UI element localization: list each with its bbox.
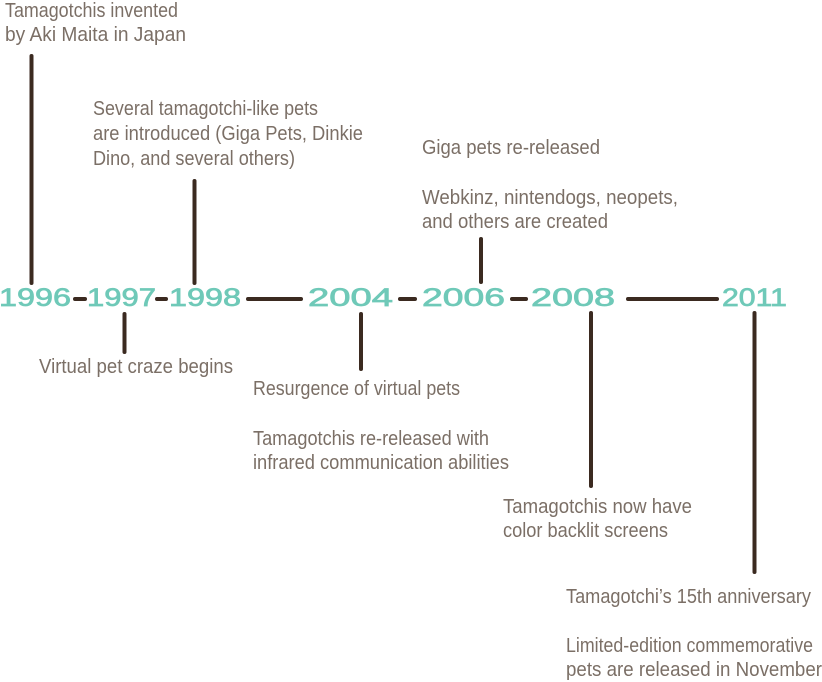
year labels: 2008 — [531, 284, 615, 312]
event 2004: Tamagotchis re-released with — [253, 428, 489, 450]
event 1998 — [93, 98, 363, 283]
event 1996 — [5, 0, 186, 283]
event 2008: color backlit screens — [503, 520, 668, 542]
year labels: 1998 — [169, 284, 241, 312]
event 1997: Virtual pet craze begins — [39, 356, 233, 378]
event 2011 — [566, 313, 822, 681]
event 1998: Dino, and several others) — [93, 148, 295, 170]
event 2006 — [422, 137, 678, 282]
year labels: 1997 — [87, 284, 156, 312]
event 2008: Tamagotchis now have — [503, 496, 692, 518]
year labels: 2006 — [422, 284, 505, 312]
year labels: 2011 — [722, 284, 787, 312]
event 2004: Resurgence of virtual pets — [253, 378, 460, 400]
event 2006: Webkinz, nintendogs, neopets, — [422, 187, 678, 209]
year labels — [0, 284, 787, 312]
event 2004: infrared communication abilities — [253, 452, 509, 474]
event 1996: Tamagotchis invented — [5, 0, 178, 22]
event 1998: are introduced (Giga Pets, Dinkie — [93, 123, 363, 145]
event 2006: Giga pets re-released — [422, 137, 600, 159]
event 2006: and others are created — [422, 211, 608, 233]
year labels: 1996 — [0, 284, 71, 312]
event 1996: by Aki Maita in Japan — [5, 24, 186, 46]
event 1998: Several tamagotchi-like pets — [93, 98, 318, 120]
event 2008 — [503, 313, 692, 542]
year labels: 2004 — [308, 284, 393, 312]
timeline axis segments — [75, 297, 717, 301]
event 2004 — [253, 314, 509, 474]
